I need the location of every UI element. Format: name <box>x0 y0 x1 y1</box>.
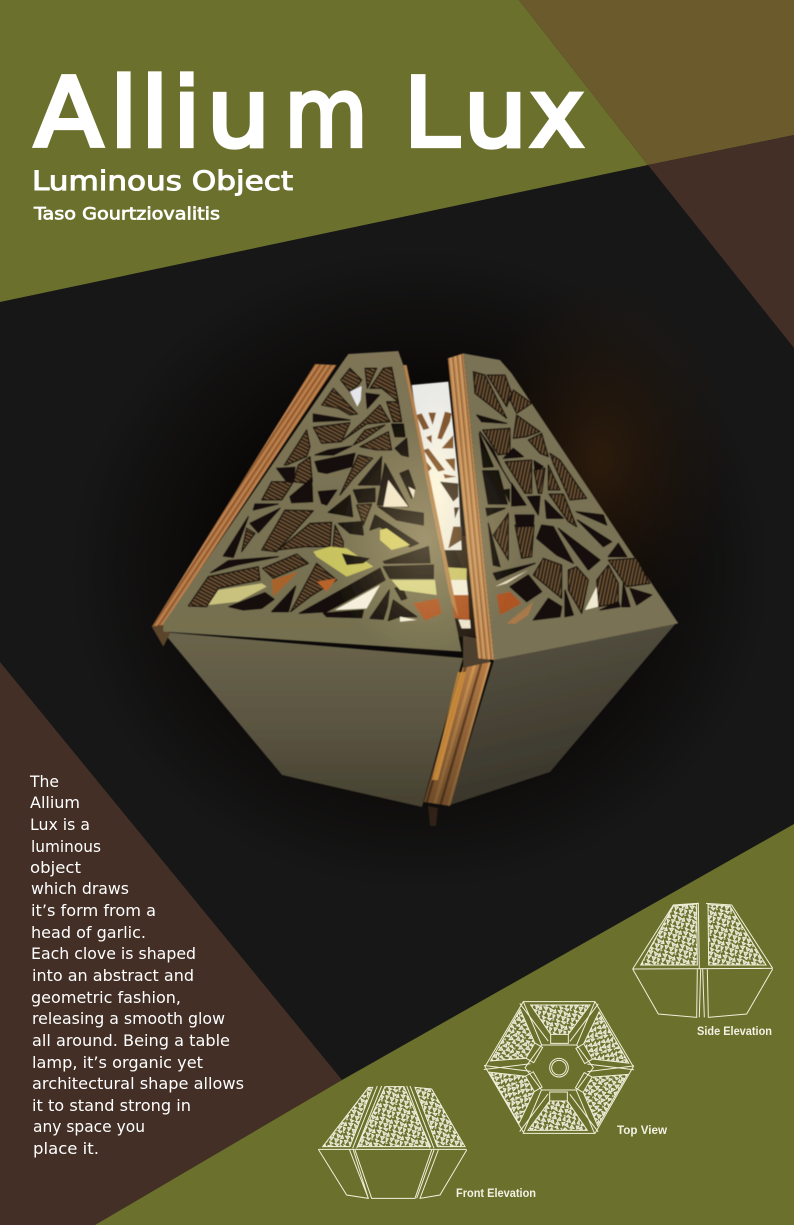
right shade panel <box>448 353 678 660</box>
lower right face <box>450 622 677 805</box>
text block: description: it’s form from a <box>31 901 156 920</box>
text block: description: object <box>30 858 81 877</box>
text block: description: it to stand strong in <box>32 1096 191 1115</box>
author: Taso Gourtziovalitis <box>33 204 220 224</box>
panel: left brown triangle <box>0 662 342 1225</box>
drawing: top view <box>484 1002 634 1134</box>
centre wood edge <box>424 636 491 806</box>
panel: bottom-right olive area <box>95 824 794 1225</box>
text block: description: Each clove is shaped <box>31 944 196 963</box>
text block: description: luminous <box>31 837 101 856</box>
lamp backdrop glow <box>70 250 770 890</box>
central light glow <box>330 420 520 660</box>
text block: description <box>29 772 244 1158</box>
text block: description: releasing a smooth glow <box>32 1009 225 1028</box>
drawing: front elevation <box>318 1086 467 1198</box>
text block: description: lamp, it’s organic yet <box>32 1053 203 1072</box>
text block: description: place it. <box>33 1139 99 1158</box>
label: side elevation: Side Elevation <box>697 1024 772 1038</box>
text block: description: Lux is a <box>30 815 90 834</box>
panel: right brown triangle <box>648 135 794 348</box>
panel: top olive banner <box>0 0 648 302</box>
text block: description: all around. Being a table <box>32 1031 230 1050</box>
left shade panel <box>152 351 462 652</box>
subtitle: Luminous Object <box>32 166 293 197</box>
title: m <box>284 58 368 169</box>
title: Alliu <box>34 58 270 169</box>
reflection below lamp <box>428 806 438 826</box>
panel: top-right ochre triangle <box>519 0 794 165</box>
text block: description: any space you <box>33 1117 145 1136</box>
label: top view: Top View <box>617 1123 668 1137</box>
lower left face <box>163 632 463 807</box>
lamp photograph illustration <box>152 351 678 826</box>
text block: description: into an abstract and <box>32 966 194 985</box>
title: Lu <box>404 58 527 169</box>
text block: description: architectural shape allows <box>32 1074 244 1093</box>
text block: description: head of garlic. <box>31 923 146 942</box>
text block: description: which draws <box>31 879 129 898</box>
label: front elevation: Front Elevation <box>456 1186 536 1200</box>
drawing: side elevation <box>633 903 773 1017</box>
text block: description: geometric fashion, <box>31 988 181 1007</box>
text block: description: The <box>29 772 59 791</box>
text block: description: Allium <box>30 793 80 812</box>
interior glowing column <box>383 382 480 637</box>
title: x <box>530 58 584 169</box>
